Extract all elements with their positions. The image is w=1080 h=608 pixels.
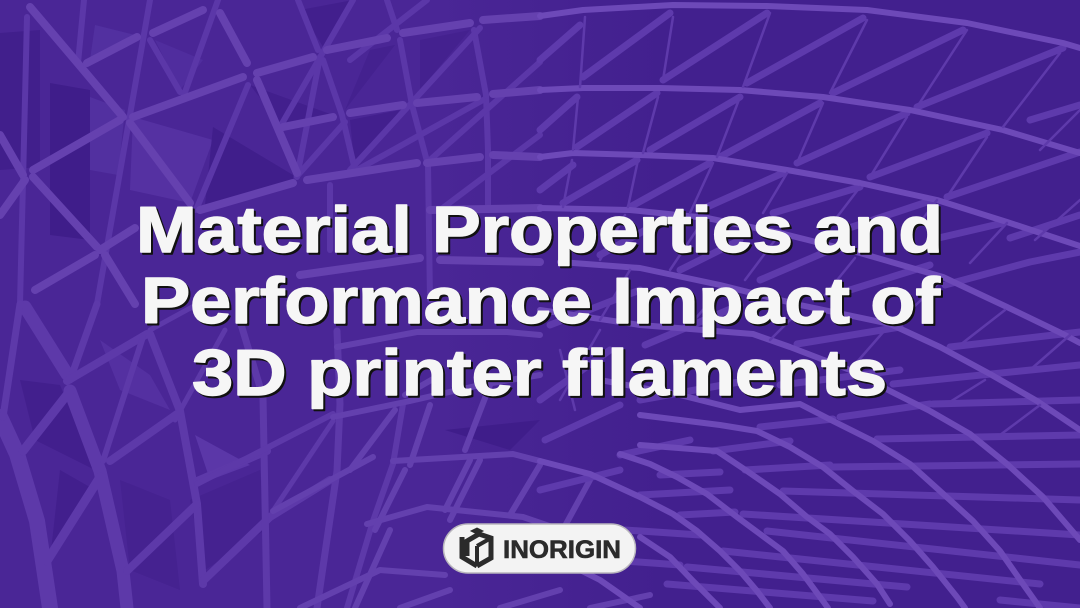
struts lower left — [0, 300, 403, 608]
struts right: thin radial ribs — [560, 13, 1080, 435]
title: 3D printer filaments — [192, 336, 887, 409]
struts upper left — [20, 0, 540, 304]
struts right: curved arcs — [540, 5, 1080, 608]
logo pill — [444, 524, 636, 573]
title: Material Properties and — [136, 193, 943, 266]
icon: inorigin hexagon cube mark — [462, 528, 491, 566]
title: Performance Impact of — [141, 264, 940, 337]
title — [136, 193, 943, 409]
struts right: thick diagonals — [540, 13, 1080, 608]
logo wordmark: INORIGIN — [503, 536, 621, 564]
